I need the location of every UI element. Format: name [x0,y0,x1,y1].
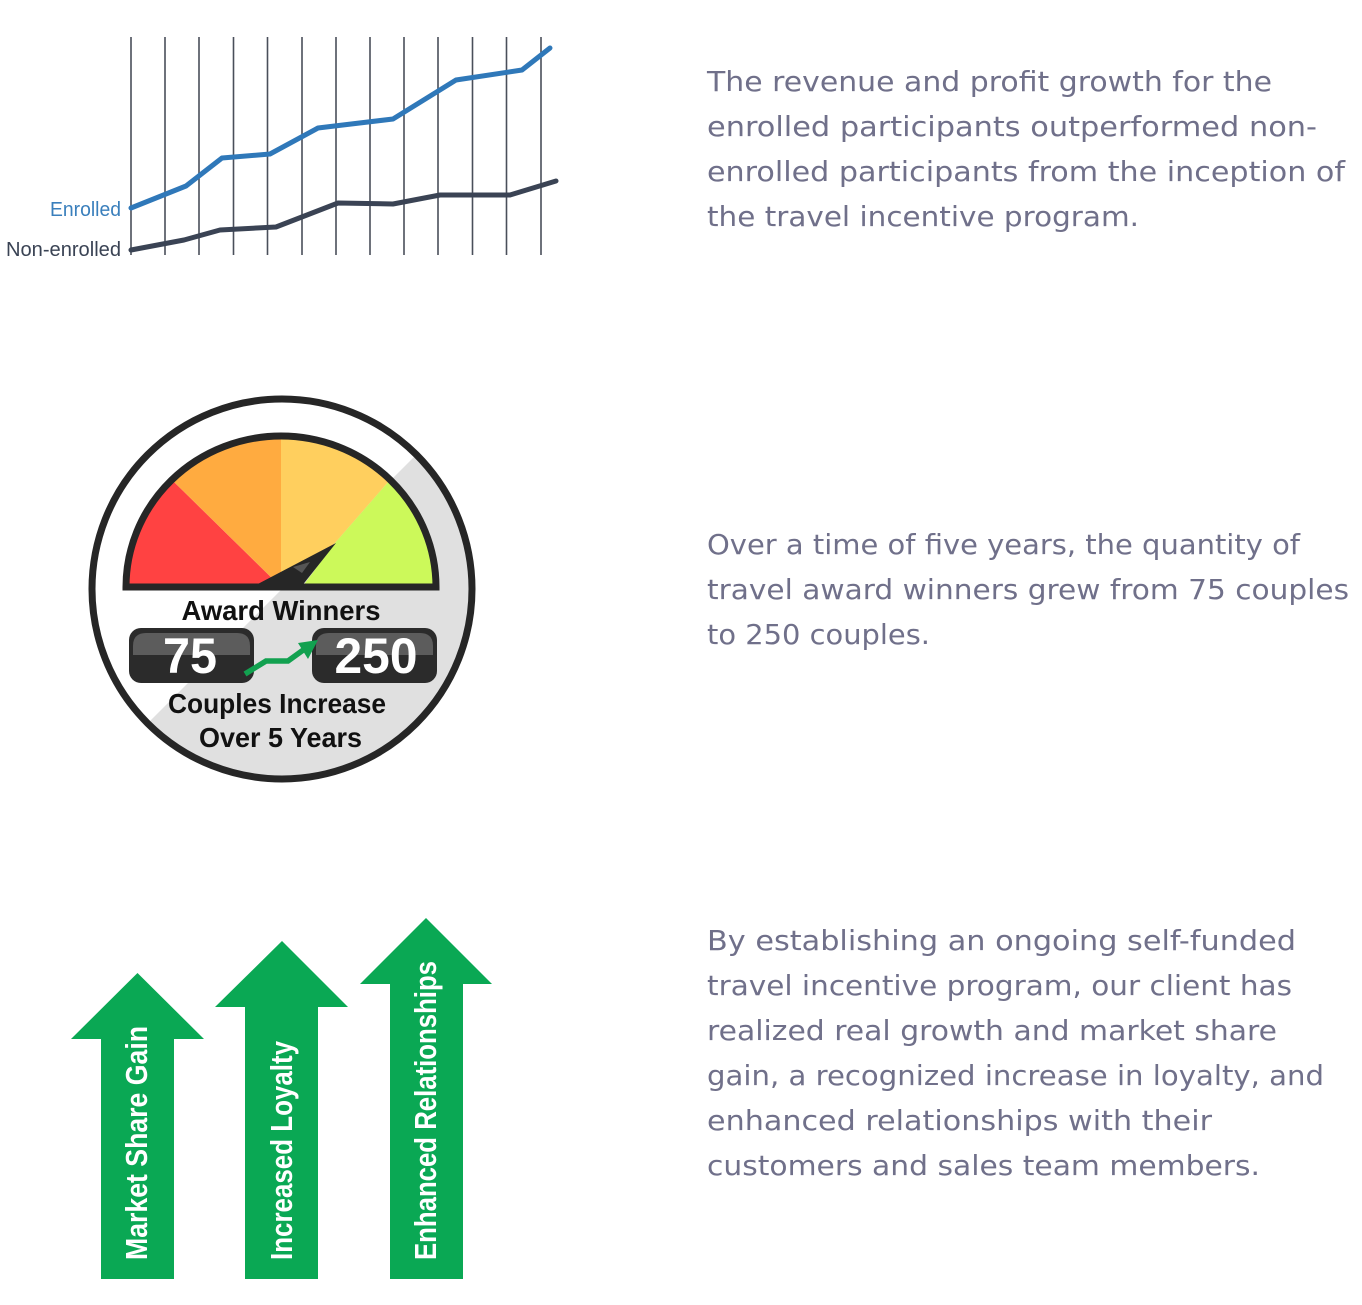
text block: revenue and profit growth [706,65,1346,233]
dial outline [126,436,436,587]
text block: revenue and profit growth: enrolled participants outperformed non- [707,110,1317,143]
counter: 75 [129,628,254,684]
text block: program outcome summary [707,924,1324,1182]
couples increase caption [168,688,386,753]
text block: revenue and profit growth: the travel incentive program. [707,200,1139,233]
text block: program outcome summary: realized real growth and market share [707,1014,1277,1047]
enrolled label: Enrolled [50,199,121,221]
counter: 250: 250 [334,628,418,684]
text block: revenue and profit growth: The revenue and profit growth for the [706,65,1272,98]
gauge dial [126,436,436,587]
text block: award winner growth: Over a time of five years, the quantity of [707,528,1301,561]
line chart: enrolled vs non-enrolled [6,37,556,261]
couples increase caption: Couples Increase [168,688,386,719]
orange segment [172,436,281,587]
text block: program outcome summary: enhanced relationships with their [707,1104,1213,1137]
green trend arrow [245,640,318,674]
enrolled line [131,48,550,208]
award winners heading: Award Winners [182,595,380,626]
text block: program outcome summary: travel incentive program, our client has [707,969,1292,1002]
arrow: enhanced relationships: Enhanced Relationships [408,961,443,1260]
yellow segment [281,436,390,587]
text block: award winner growth: travel award winners grew from 75 couples [707,573,1349,606]
needle [252,543,336,587]
arrow: market share gain: Market Share Gain [119,1026,154,1260]
counter: 75: 75 [163,628,217,684]
text block: award winner growth: to 250 couples. [707,618,930,651]
counter: 250 [312,628,437,684]
text block: revenue and profit growth: enrolled participants from the inception of [707,155,1346,188]
text block: program outcome summary: By establishing an ongoing self-funded [707,924,1296,957]
non-enrolled line [131,181,556,250]
couples increase caption: Over 5 Years [199,722,362,753]
non-enrolled label: Non-enrolled [6,239,121,261]
green segment [302,480,436,587]
arrow: increased loyalty [215,941,348,1279]
arrow: enhanced relationships [360,918,492,1279]
arrow: increased loyalty: Increased Loyalty [264,1040,299,1260]
red segment [126,480,281,587]
badge outer ring [92,399,472,779]
badge diagonal grey shade [150,457,468,776]
gauge badge: award winners [92,399,500,800]
chart grid lines [131,37,541,255]
text block: program outcome summary: gain, a recognized increase in loyalty, and [707,1059,1324,1092]
text block: program outcome summary: customers and sales team members. [707,1149,1260,1182]
badge background [92,399,472,779]
arrow: market share gain [71,973,204,1279]
text block: award winner growth [707,528,1349,651]
